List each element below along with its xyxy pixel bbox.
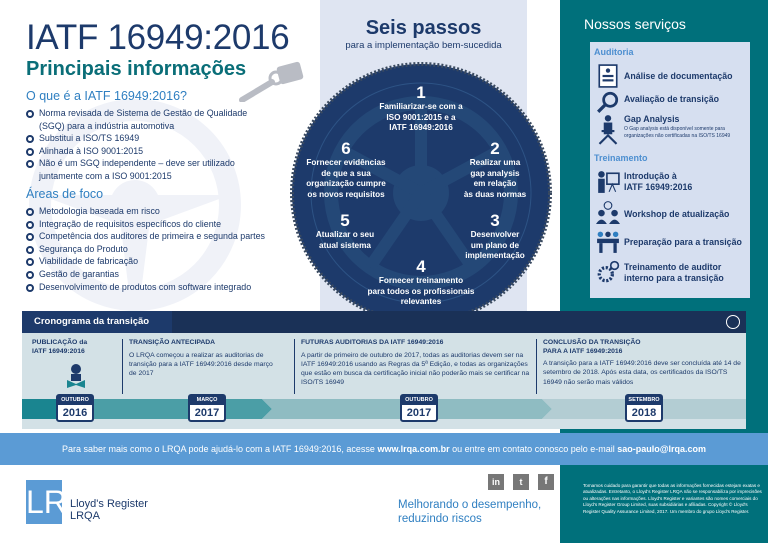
section: what is: (SGQ) para a indústria automotiva — [39, 121, 174, 131]
section: what is: Norma revisada de Sistema de Gestão de Qualidade — [39, 108, 247, 118]
panel: services box: Gap Analysis — [624, 114, 679, 124]
milestone 3 — [294, 339, 538, 394]
step 3: implementação — [465, 251, 525, 260]
section: focus areas: Viabilidade de fabricação — [39, 256, 138, 266]
heading: six steps: Seis passos — [366, 17, 481, 39]
step 6: de que a sua — [321, 168, 371, 178]
section: focus areas: Metodologia baseada em risco — [39, 206, 160, 216]
icon: magnifier — [597, 92, 618, 113]
wheel texts — [306, 83, 526, 306]
panel: services box: Treinamento — [594, 153, 648, 163]
section: focus areas: Competência dos auditores de primeira e segunda partes — [39, 231, 265, 241]
title: IATF 16949:2016 — [26, 18, 289, 57]
section: focus areas — [26, 186, 265, 292]
milestone 1: IATF 16949:2016 — [32, 348, 85, 354]
tagline: reduzindo riscos — [398, 513, 482, 525]
step 5: atual sistema — [319, 240, 371, 250]
section: what is — [26, 89, 247, 181]
milestone 2: O LRQA começou a realizar as auditorias de transição para a IATF 16949:2016 desde março de 2017 — [129, 352, 273, 377]
footer contact bar — [0, 433, 768, 465]
section: what is: Não é um SGQ independente – deve ser utilizado — [39, 158, 235, 168]
step 2: Realizar uma — [470, 158, 520, 167]
social icons: f — [544, 476, 548, 487]
milestone 1: PUBLICAÇÃO da — [32, 339, 87, 346]
step 3 — [465, 211, 525, 260]
milestone 3: A partir de primeiro de outubro de 2017, todas as auditorias devem ser na IATF 16949:2016 usando as Regras da 5ª Edição, e todas as organizações que estão em busca da certificação inicial não poderão mais se certificar na ISO/TS 16949 — [301, 352, 529, 386]
panel: services box: Análise de documentação — [624, 71, 733, 81]
tagline — [398, 499, 541, 525]
step 4: relevantes — [401, 297, 441, 306]
panel: services box: Avaliação de transição — [624, 94, 719, 104]
step 6: organização cumpre — [306, 179, 386, 188]
icon: car key — [239, 62, 304, 102]
milestone 2: TRANSIÇÃO ANTECIPADA — [129, 339, 215, 346]
panel: timeline: SETEMBRO — [628, 397, 660, 403]
panel: services box: Auditoria — [594, 47, 634, 57]
milestone 4: CONCLUSÃO DA TRANSIÇÃO — [543, 339, 641, 346]
social icons: in — [492, 477, 500, 487]
step 1: 1 — [416, 83, 426, 102]
icon: document — [598, 64, 618, 88]
panel: timeline: MARÇO — [197, 397, 217, 403]
milestone 2 — [122, 339, 282, 394]
tagline: Melhorando o desempenho, — [398, 499, 541, 511]
panel: services teal column — [560, 0, 768, 543]
panel: services box — [590, 42, 750, 298]
panel: services box: Workshop de atualização — [624, 209, 729, 219]
icon: clock — [726, 315, 740, 329]
step 1: IATF 16949:2016 — [389, 123, 453, 132]
icon: reader — [67, 364, 85, 388]
milestone 1 — [32, 338, 88, 354]
date badges: 2016 — [63, 407, 87, 419]
step 2 — [464, 139, 526, 198]
date badges: OUTUBRO — [61, 397, 89, 403]
date badges — [56, 394, 94, 422]
panel: services box: Introdução à — [624, 171, 677, 181]
section: focus areas: Áreas de foco — [26, 187, 103, 201]
panel: services box: IATF 16949:2016 — [624, 182, 692, 192]
panel: timeline: 2018 — [632, 407, 656, 419]
icon: person — [598, 115, 618, 145]
icon: meeting — [597, 232, 619, 253]
step 4: 4 — [416, 257, 426, 276]
step 1: Familiarizar-se com a — [379, 102, 463, 111]
disclaimer: Tomamos cuidado para garantir que todas as informações fornecidas estejam exatas e atualizadas. Entretanto, o Lloyd's Register LRQA não se responsabiliza por imprecisões ou alterações nas informações. Lloyd's Register e variantes são nomes comerciais do Lloyd's Register Group Limited, suas subsidiárias e afiliadas. Copyright © Lloyd's Register Quality Assurance Limited, 2017. Um membro do grupo Lloyd's Register. — [583, 483, 762, 514]
panel: timeline: OUTUBRO — [405, 397, 433, 403]
panel: services box: Preparação para a transição — [624, 237, 742, 247]
step 2: em relação — [474, 179, 516, 188]
section: focus areas: Segurança do Produto — [39, 244, 128, 254]
step 3: um plano de — [471, 240, 519, 250]
milestone 4: PARA A IATF 16949:2016 — [543, 348, 622, 354]
step 5: 5 — [340, 211, 350, 230]
decorative steering wheel — [29, 99, 241, 311]
heading: six steps: para a implementação bem-sucedida — [345, 40, 502, 51]
step 6: 6 — [341, 139, 351, 158]
step 4: Fornecer treinamento — [379, 276, 463, 285]
section: what is: O que é a IATF 16949:2016? — [26, 89, 187, 103]
arrow track — [22, 399, 746, 419]
icon: gears — [598, 260, 620, 282]
heading: services: Nossos serviços — [584, 16, 686, 32]
section: focus areas: Desenvolvimento de produtos com software integrado — [39, 282, 251, 292]
heading: six steps — [345, 17, 502, 51]
subtitle: Principais informações — [26, 58, 246, 80]
social icons — [488, 474, 554, 490]
social icons: t — [520, 477, 522, 487]
logo: LRQA — [70, 510, 100, 522]
step 6 — [306, 139, 386, 198]
step 5 — [316, 211, 374, 250]
footer contact bar: Para saber mais como o LRQA pode ajudá-lo com a IATF 16949:2016, acesse www.lrqa.com.br ou entre em contato conosco pelo e-mail sao-paulo@lrqa.com — [62, 444, 706, 454]
step 4 — [368, 257, 474, 306]
panel: services box: interno para a transição — [624, 272, 724, 282]
step 2: gap analysis — [470, 168, 520, 178]
logo — [26, 480, 148, 524]
section: what is: Alinhada à ISO 9001:2015 — [39, 146, 143, 156]
step 2: 2 — [490, 139, 500, 158]
step 1: ISO 9001:2015 e a — [386, 112, 456, 122]
step 1 — [379, 83, 463, 132]
step 6: os novos requisitos — [307, 190, 385, 198]
section: what is: juntamente com a ISO 9001:2015 — [39, 171, 172, 181]
section: focus areas: Gestão de garantias — [39, 269, 119, 279]
panel: timeline: 2017 — [407, 407, 431, 419]
milestone 4 — [536, 339, 746, 394]
step 3: Desenvolver — [471, 230, 519, 239]
section: what is: Substitui a ISO/TS 16949 — [39, 133, 139, 143]
step 6: Fornecer evidências — [306, 158, 386, 167]
milestone 3: FUTURAS AUDITORIAS DA IATF 16949:2016 — [301, 339, 443, 346]
step 3: 3 — [490, 211, 500, 230]
panel: timeline — [22, 311, 746, 429]
icon: teacher — [598, 171, 620, 193]
timeline header — [22, 311, 746, 333]
icon: workshop — [596, 201, 620, 224]
milestone 4: A transição para a IATF 16949:2016 deve ser concluída até 14 de setembro de 2018. Após esta data, os certificados da ISO/TS 16949 não serão mais válidos — [543, 360, 741, 386]
section: focus areas: Integração de requisitos específicos do cliente — [39, 219, 221, 229]
step 5: Atualizar o seu — [316, 230, 374, 239]
logo: LR — [26, 484, 67, 520]
step 4: para todos os profissionais — [368, 286, 474, 296]
panel: middle background — [320, 0, 527, 312]
wheel diagram — [290, 62, 552, 311]
panel: timeline: 2017 — [195, 407, 219, 419]
panel: services box: Treinamento de auditor — [624, 262, 721, 272]
panel: services box: O Gap analysis está disponível somente para organizações não certificadas na ISO/TS 16949 — [624, 126, 730, 138]
logo: Lloyd's Register — [70, 498, 148, 510]
timeline header: Cronograma da transição — [34, 316, 149, 327]
step 2: às duas normas — [464, 190, 526, 198]
